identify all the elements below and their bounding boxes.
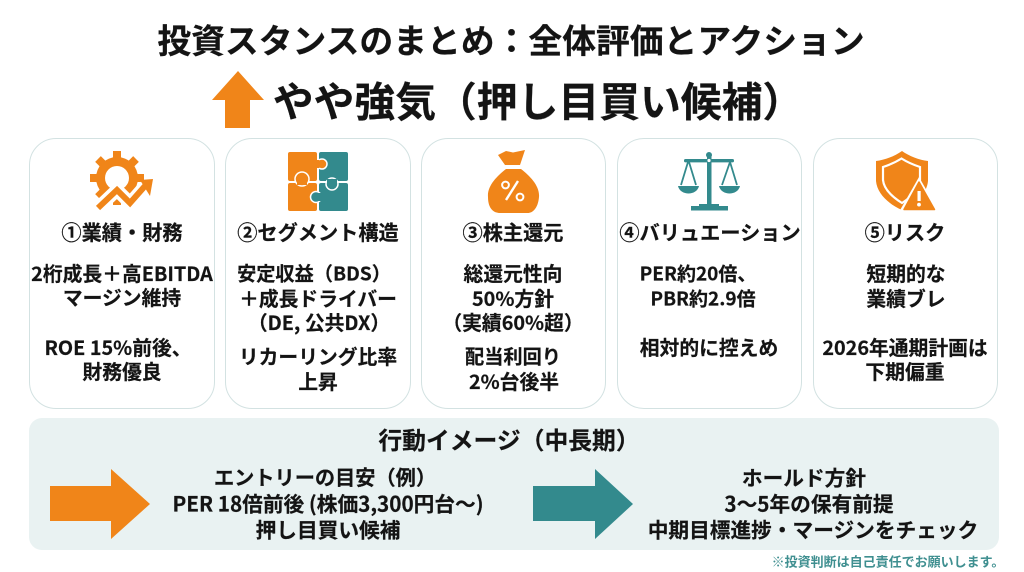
heading: card 5: ⑤リスク [865,216,945,245]
text: card 1 line 2: マージン維持 [63,282,181,311]
title: 投資スタンスのまとめ：全体評価とアクション [157,14,865,63]
text: card 2 line 3: （DE, 公共DX） [248,307,390,336]
text: card 2 line 4: リカーリング比率 [239,341,397,370]
text: hold line 1: ホールド方針 [742,461,866,491]
text: card 1 line 4: 財務優良 [82,356,162,385]
text: entry line 3: 押し目買い候補 [256,513,400,543]
icon: up arrow [212,71,264,128]
panel: card 2 segments [225,138,411,409]
text: card 5 line 1: 短期的な [866,258,946,287]
icon: gear with growth arrow [90,151,153,210]
arrow: entry [50,469,150,539]
panel: action image [29,418,999,550]
text: card 5 line 2: 業績ブレ [866,283,946,312]
text: card 3 line 3: （実績60%超） [442,307,584,336]
text: entry line 2: PER 18倍前後 (株価3,300円台～) [172,487,484,517]
panel: card 4 valuation [617,138,802,409]
text: card 4 line 1: PER約20倍、 [640,259,756,286]
text: card 4 line 3: 相対的に控えめ [640,332,778,361]
heading: card 3: ③株主還元 [463,216,563,245]
text: card 5 line 3: 2026年通期計画は [822,332,988,361]
text: entry line 1: エントリーの目安（例） [214,461,436,490]
text: card 1 line 3: ROE 15%前後、 [44,332,192,361]
text: card 5 line 4: 下期偏重 [865,356,945,385]
heading: card 1: ①業績・財務 [61,216,183,245]
heading: action image: 行動イメージ（中長期） [378,421,640,456]
arrow: hold [533,469,633,539]
stance heading: やや強気（押し目買い候補） [273,69,803,128]
panel: card 3 shareholder returns [421,138,606,409]
text: card 3 line 2: 50%方針 [472,283,554,312]
text: hold line 3: 中期目標進捗・マージンをチェック [648,513,978,543]
heading: card 2: ②セグメント構造 [237,216,399,245]
panel: card 1 performance [29,138,215,409]
icon: balance scale [678,152,740,210]
footnote: ※投資判断は自己責任でお願いします。 [772,551,1004,570]
icon: shield with warning [876,151,936,210]
text: card 2 line 2: ＋成長ドライバー [239,283,397,312]
icon: money bag [488,150,540,213]
heading: card 4: ④バリュエーション [619,216,801,245]
text: card 1 line 1: 2桁成長＋高EBITDA [31,258,213,287]
text: hold line 2: 3～5年の保有前提 [724,487,894,517]
panel: card 5 risk [813,138,998,409]
text: card 4 line 2: PBR約2.9倍 [650,284,756,311]
text: card 2 line 1: 安定収益（BDS） [237,258,391,286]
text: card 3 line 4: 配当利回り [465,341,561,369]
text: card 2 line 5: 上昇 [298,366,338,395]
icon: puzzle [288,152,348,211]
text: card 3 line 1: 総還元性向 [464,258,562,287]
text: card 3 line 5: 2%台後半 [469,366,559,395]
